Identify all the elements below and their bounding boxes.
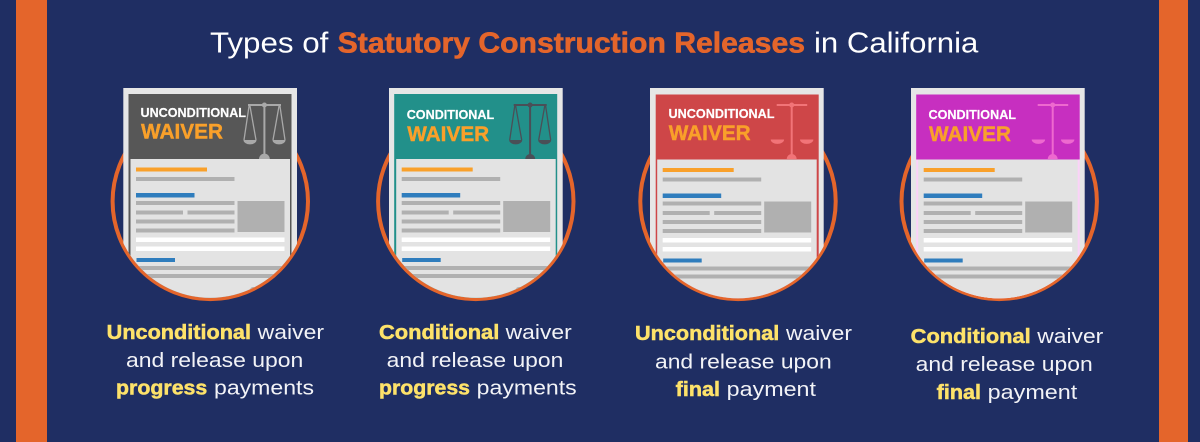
caption: unconditional final: payment [727, 378, 816, 401]
title: Statutory Construction Releases [338, 28, 805, 60]
panel: unconditional progress waiver [113, 88, 308, 304]
title [210, 28, 979, 60]
orange circle [378, 104, 574, 299]
document [911, 88, 1085, 304]
caption: unconditional progress [107, 321, 324, 400]
title: Types of [210, 28, 329, 60]
left orange stripe [16, 0, 47, 442]
caption: conditional progress: progress [379, 377, 470, 400]
document [123, 88, 297, 304]
header text: UNCONDITIONAL [140, 106, 246, 120]
orange circle [902, 104, 1097, 299]
caption: conditional final: Conditional [911, 325, 1031, 348]
caption: conditional final: final [937, 381, 981, 404]
caption: conditional final: waiver [1036, 325, 1103, 348]
header text: WAIVER [929, 123, 1011, 146]
document [389, 88, 563, 304]
panel: conditional final waiver [902, 88, 1097, 304]
header text [140, 108, 246, 139]
caption: conditional progress: Conditional [379, 321, 499, 344]
caption: unconditional progress: Unconditional [107, 321, 251, 344]
caption: conditional progress [379, 321, 577, 400]
caption: conditional final: and release upon [916, 353, 1093, 376]
orange circle [113, 104, 308, 299]
header text: WAIVER [407, 123, 489, 146]
caption: conditional final [911, 325, 1103, 404]
orange circle [640, 104, 836, 299]
caption: conditional final: payment [988, 381, 1078, 404]
header text: CONDITIONAL [407, 108, 495, 122]
caption: conditional progress: waiver [505, 321, 572, 344]
title: in California [814, 28, 979, 60]
caption: unconditional progress: and release upon [126, 349, 303, 372]
caption: conditional progress: and release upon [387, 349, 563, 372]
header text: WAIVER [669, 122, 751, 145]
header text: UNCONDITIONAL [669, 107, 775, 121]
icon: scales [509, 102, 551, 159]
caption: unconditional progress: payments [214, 377, 314, 400]
caption: unconditional final: waiver [785, 322, 852, 345]
header text [407, 110, 494, 142]
icon: scales [1032, 102, 1074, 159]
header text [928, 110, 1016, 142]
document [650, 88, 824, 304]
panel: conditional progress waiver [378, 88, 574, 304]
right orange stripe [1159, 0, 1188, 442]
caption: unconditional final: final [676, 378, 720, 401]
panel: unconditional final waiver [640, 88, 836, 304]
caption: unconditional final [635, 322, 852, 401]
caption: unconditional progress: progress [116, 377, 207, 400]
icon: scales [771, 102, 813, 159]
caption: unconditional final: and release upon [655, 350, 832, 373]
icon: scales [244, 102, 286, 159]
caption: conditional progress: payments [477, 377, 577, 400]
header text: CONDITIONAL [929, 108, 1016, 122]
caption: unconditional final: Unconditional [635, 322, 779, 345]
caption: unconditional progress: waiver [257, 321, 324, 344]
header text: WAIVER [141, 120, 223, 144]
header text [668, 108, 774, 140]
